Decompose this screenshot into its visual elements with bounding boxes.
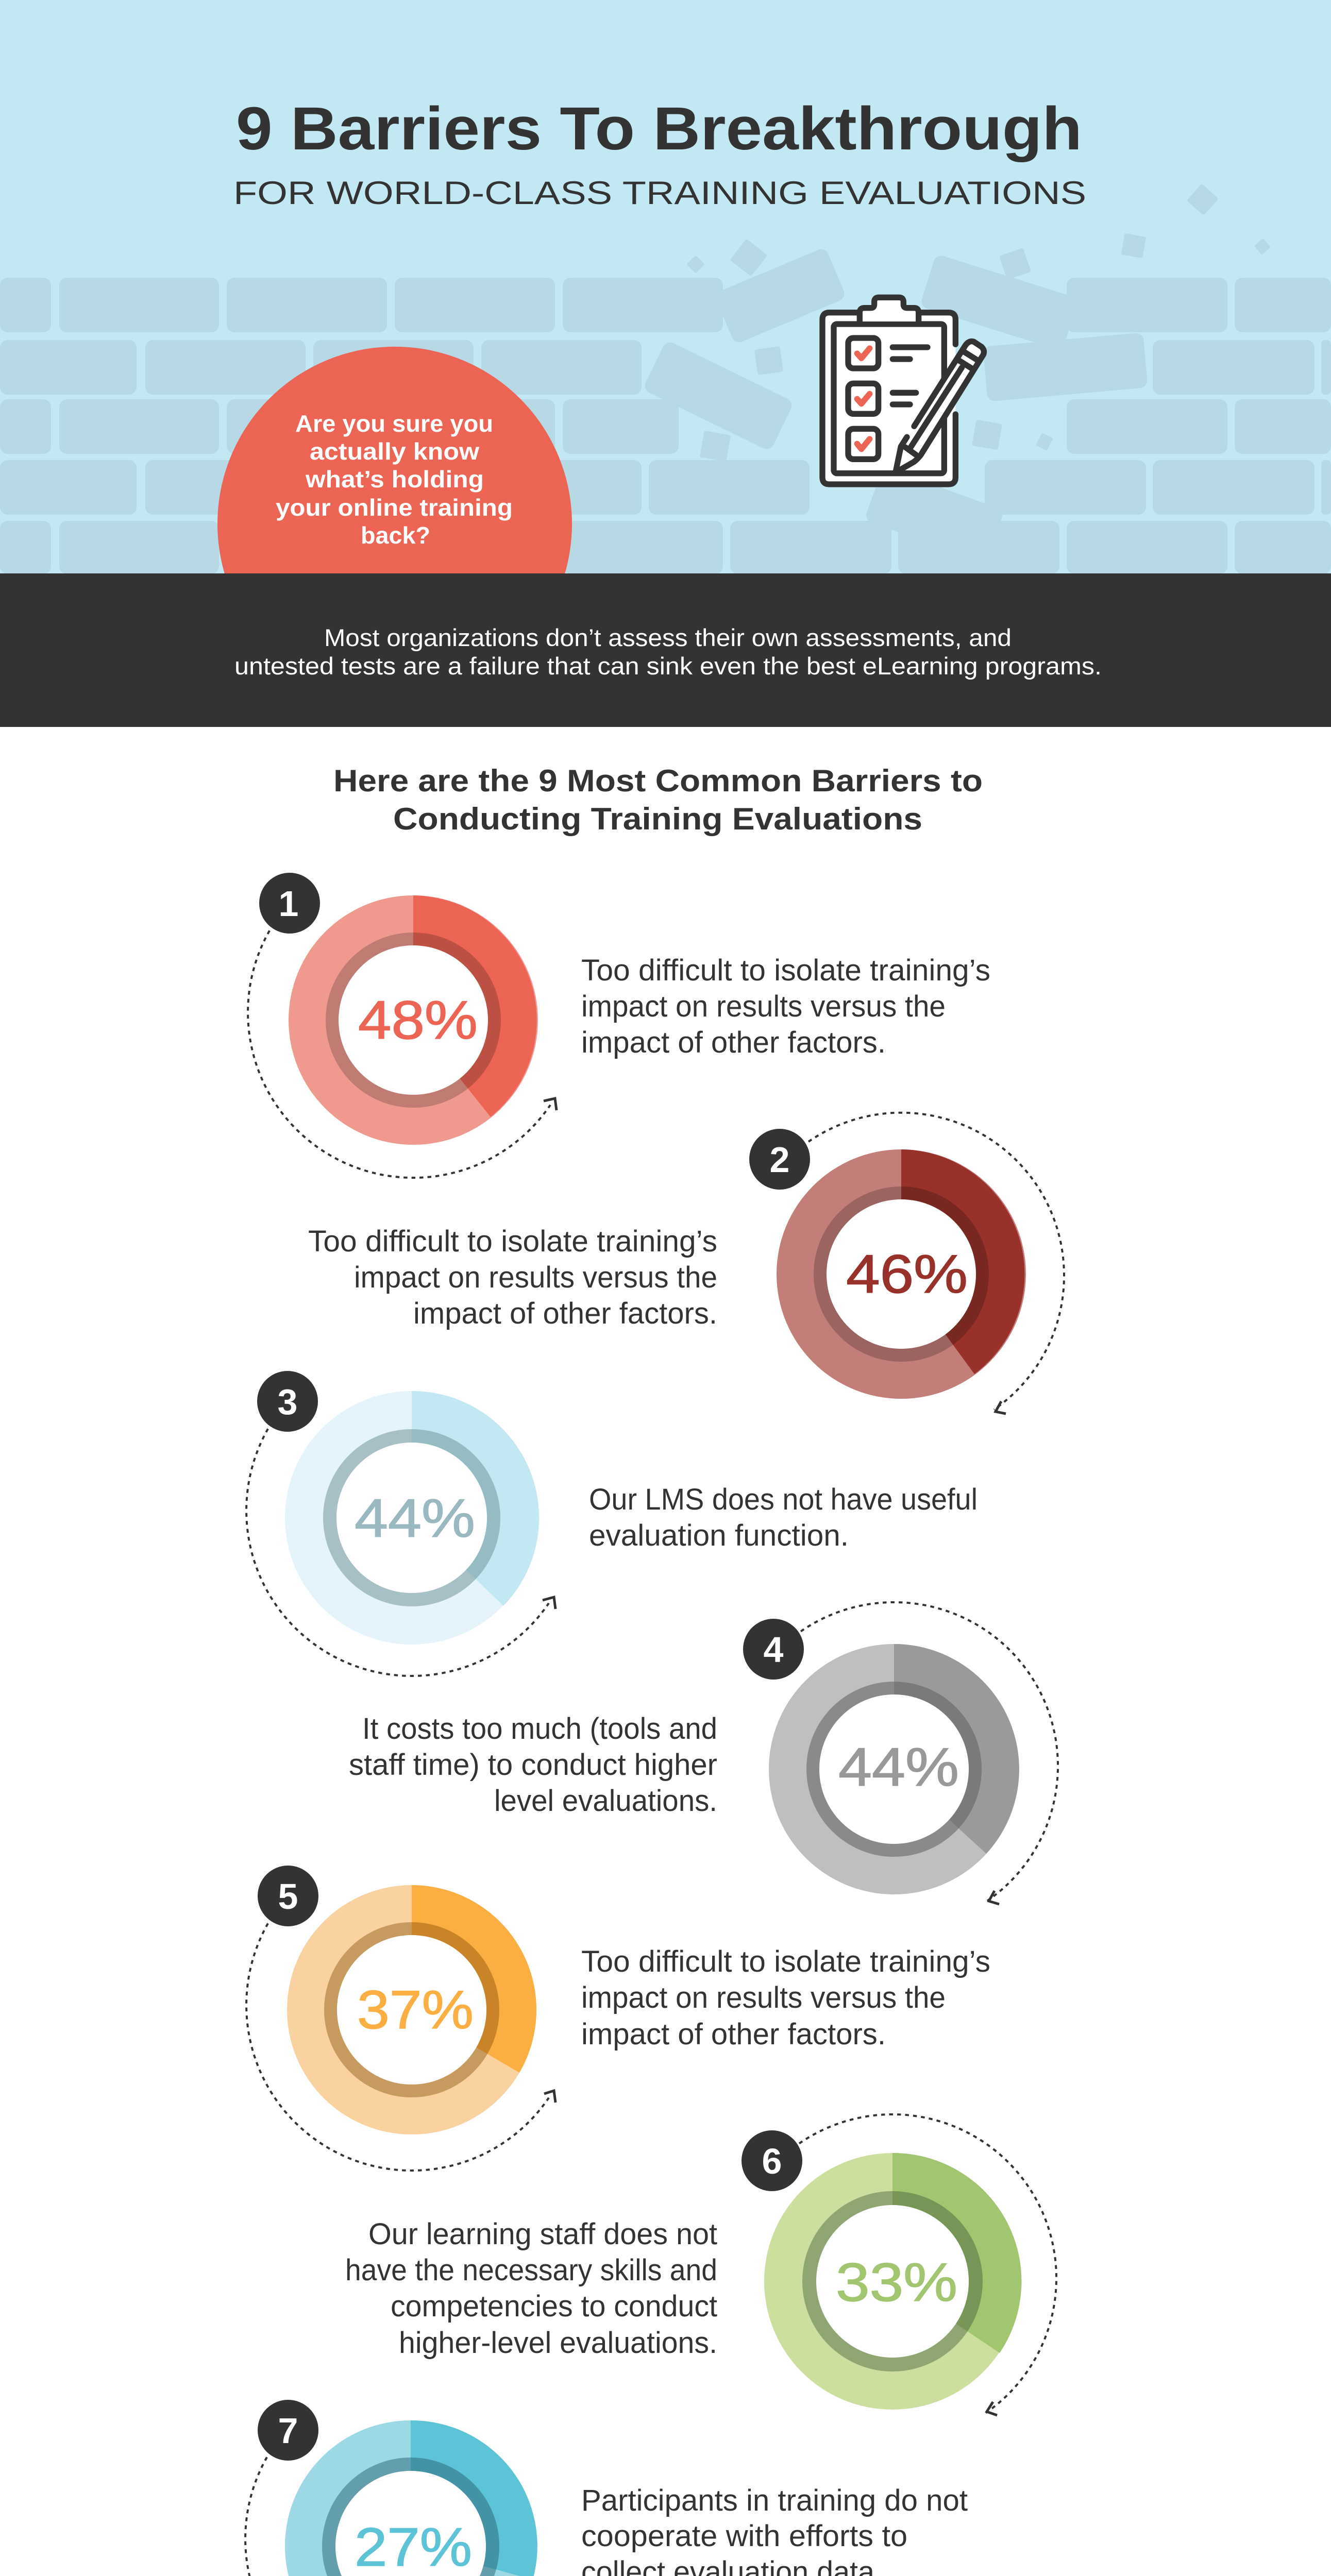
arrow: dotted arc	[801, 1602, 1058, 1904]
text 7	[581, 2484, 968, 2576]
text 6: Our learning staff does not	[368, 2217, 717, 2251]
text 6	[345, 2217, 717, 2360]
arrow: dotted arc	[246, 1429, 555, 1676]
donut 46%: 46%	[846, 1244, 968, 1304]
donut 37%	[287, 1885, 536, 2134]
heading: barriers: Conducting Training Evaluations	[393, 802, 922, 836]
number badge 7	[258, 2400, 318, 2461]
text 6: have the necessary skills and	[345, 2253, 717, 2287]
donut 44%: 44%	[355, 1488, 475, 1549]
arrow: dotted arc	[246, 1923, 555, 2171]
text 6: higher-level evaluations.	[399, 2326, 717, 2360]
falling bricks	[643, 183, 1271, 564]
barrier 6	[345, 2114, 1056, 2415]
heading: barriers	[333, 764, 983, 836]
icon: clipboard with pencil	[822, 297, 984, 484]
text 1: impact on results versus the	[581, 990, 946, 1023]
callout circle: actually know	[310, 438, 479, 465]
donut 33%	[764, 2153, 1021, 2410]
text 1: Too difficult to isolate training’s	[581, 954, 990, 987]
donut 48%	[289, 895, 538, 1145]
number badge 5	[258, 1866, 318, 1926]
text 1: impact of other factors.	[581, 1026, 886, 1059]
number badge 1: 1	[279, 884, 298, 924]
text 5	[581, 1945, 990, 2051]
text 4: staff time) to conduct higher	[349, 1748, 717, 1782]
barrier 5	[246, 1866, 990, 2171]
arrow: dotted arc	[248, 930, 557, 1178]
callout circle: your online training	[276, 494, 513, 521]
text 2: impact of other factors.	[413, 1297, 717, 1330]
number badge 3	[257, 1371, 318, 1432]
barrier 4	[349, 1602, 1058, 1904]
donut 27%	[285, 2420, 537, 2576]
title: 9 Barriers To Breakthrough	[236, 95, 1082, 163]
text 2: Too difficult to isolate training’s	[308, 1225, 717, 1258]
text 5: Too difficult to isolate training’s	[581, 1945, 990, 1978]
panel: intro band	[0, 573, 1331, 727]
donut 44%	[285, 1391, 539, 1645]
donut 46%	[777, 1149, 1026, 1399]
callout circle: Are you sure you	[295, 410, 493, 437]
text 4: level evaluations.	[494, 1784, 717, 1818]
number badge 2	[749, 1129, 810, 1190]
number badge 3: 3	[278, 1382, 297, 1422]
number badge 4	[743, 1619, 804, 1680]
heading: barriers: Here are the 9 Most Common Barriers to	[333, 764, 983, 798]
number badge 6	[742, 2130, 802, 2191]
text 3	[589, 1483, 978, 1552]
donut 44%: 44%	[838, 1737, 959, 1798]
number badge 7: 7	[278, 2411, 298, 2451]
text 7: cooperate with efforts to	[581, 2519, 907, 2553]
text 5: impact on results versus the	[581, 1981, 946, 2014]
text 3: evaluation function.	[589, 1519, 849, 1552]
callout circle: back?	[361, 522, 430, 549]
number badge 6: 6	[762, 2141, 782, 2181]
barrier 1	[248, 873, 990, 1178]
barrier 2	[308, 1113, 1064, 1414]
callout circle: what’s holding	[305, 466, 484, 493]
donut 37%: 37%	[357, 1980, 474, 2040]
barrier 7	[245, 2400, 968, 2576]
text 1	[581, 954, 990, 1059]
text 5: impact of other factors.	[581, 2018, 886, 2051]
panel: intro band: untested tests are a failure that can sink even the best eLearning programs.	[234, 652, 1102, 680]
subtitle: FOR WORLD-CLASS TRAINING EVALUATIONS	[233, 175, 1086, 211]
donut 33%: 33%	[836, 2252, 957, 2313]
number badge 5: 5	[278, 1876, 298, 1917]
number badge 4: 4	[764, 1630, 784, 1670]
arrow: dotted arc	[245, 2457, 555, 2576]
number badge 2: 2	[770, 1140, 789, 1180]
text 3: Our LMS does not have useful	[589, 1483, 978, 1516]
text 6: competencies to conduct	[391, 2290, 717, 2323]
panel: intro band: Most organizations don’t assess their own assessments, and	[324, 624, 1012, 651]
brick wall	[0, 278, 1331, 574]
panel: header	[0, 0, 1331, 574]
text 2: impact on results versus the	[354, 1261, 717, 1294]
barrier 3	[246, 1371, 978, 1676]
text 4	[349, 1712, 717, 1818]
donut 27%: 27%	[355, 2517, 472, 2576]
callout circle	[217, 347, 572, 574]
text 7: Participants in training do not	[581, 2484, 968, 2517]
arrow: dotted arc	[808, 1113, 1064, 1414]
donut 48%: 48%	[358, 990, 478, 1050]
arrow: dotted arc	[799, 2114, 1056, 2415]
text 4: It costs too much (tools and	[362, 1712, 717, 1745]
text 2	[308, 1225, 717, 1330]
number badge 1	[259, 873, 320, 934]
donut 44%	[769, 1644, 1019, 1894]
